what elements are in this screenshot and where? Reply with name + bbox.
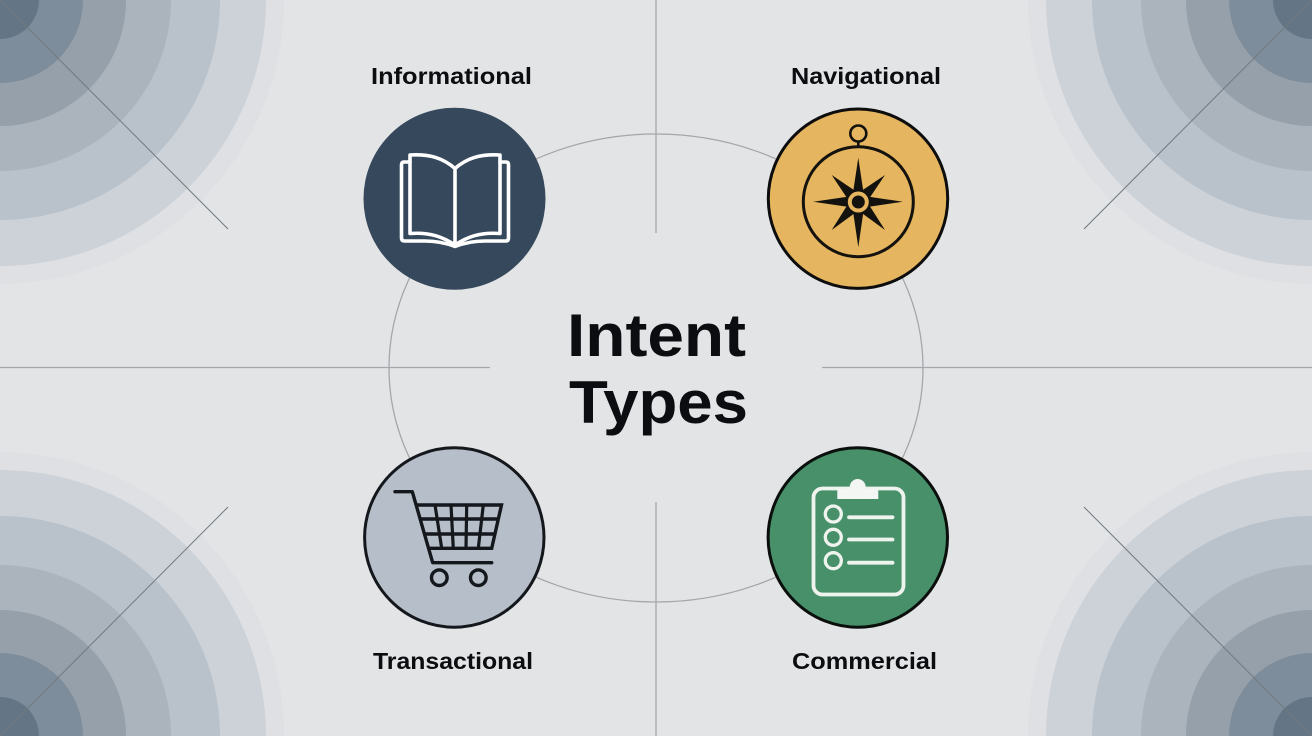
node: Commercial bbox=[768, 448, 948, 674]
concentric rings: top left bbox=[0, 0, 284, 284]
title bbox=[567, 302, 748, 436]
node: Informational bbox=[364, 63, 546, 290]
icon: open book bbox=[402, 155, 508, 246]
label: Informational: Informational bbox=[371, 63, 532, 89]
concentric rings: bottom right bbox=[1028, 452, 1312, 736]
circle: Informational bbox=[364, 108, 546, 290]
title: Intent bbox=[567, 302, 746, 369]
circle: Navigational bbox=[768, 109, 948, 288]
node: Transactional bbox=[365, 448, 544, 674]
circle: Transactional bbox=[365, 448, 544, 627]
circle: Commercial bbox=[768, 448, 948, 627]
icon: clipboard checklist bbox=[814, 479, 904, 594]
node: Navigational bbox=[768, 63, 948, 288]
title: Types bbox=[569, 369, 748, 436]
label: Navigational: Navigational bbox=[791, 63, 941, 89]
concentric rings: top right bbox=[1028, 0, 1312, 284]
label: Transactional: Transactional bbox=[373, 648, 533, 674]
concentric rings: bottom left bbox=[0, 452, 284, 736]
connecting ring bbox=[389, 134, 923, 602]
icon: shopping cart bbox=[395, 492, 502, 586]
label: Commercial: Commercial bbox=[792, 648, 937, 674]
icon: compass bbox=[803, 126, 913, 257]
